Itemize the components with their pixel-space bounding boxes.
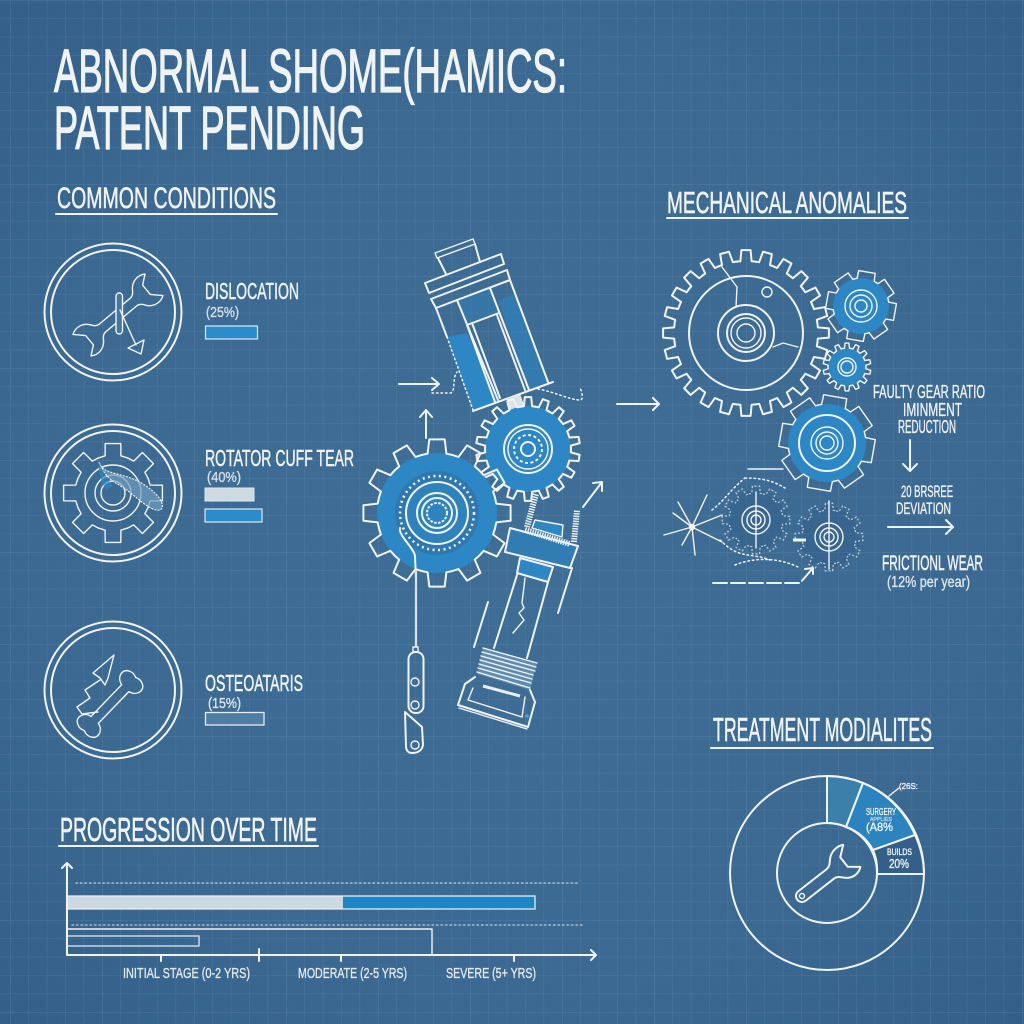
label: degree deviation: DEVIATION [896, 499, 951, 518]
donut labels [866, 782, 918, 871]
arrow: right [888, 520, 953, 534]
title [54, 37, 567, 162]
axis labels: SEVERE (5+ YRS) [446, 965, 536, 982]
label: dislocation [205, 278, 299, 339]
donut labels: (A8% [866, 820, 893, 834]
axis labels [123, 965, 536, 982]
gear: blue center right [748, 394, 876, 492]
label: osteoataris [205, 670, 303, 725]
label: dislocation: DISLOCATION [205, 278, 299, 304]
bar chart [62, 863, 596, 982]
diagram: central joint mechanism [363, 239, 659, 753]
label: frictional wear [882, 552, 983, 591]
label: rotator cuff tear: (40%) [207, 469, 241, 486]
handle link [400, 528, 424, 753]
label: dislocation: (25%) [206, 304, 239, 321]
axis labels: INITIAL STAGE (0-2 YRS) [123, 965, 250, 982]
panel: treatment modalities [711, 711, 933, 970]
label: rotator cuff tear: ROTATOR CUFF TEAR [205, 445, 354, 471]
arrow: dashed to wear [713, 568, 813, 583]
donut labels: SURGERY [866, 807, 896, 818]
label: faulty gear ratio [873, 382, 985, 437]
arrow: up [420, 410, 432, 438]
panel: progression over time [59, 811, 596, 982]
cylinder assembly [399, 239, 582, 428]
icon: wrench with arrow [44, 244, 182, 380]
gears: worn ghost pair [712, 478, 863, 571]
label: osteoataris: OSTEOATARIS [205, 670, 303, 696]
arrow: towards anomalies [617, 398, 659, 410]
icon: friction spark [664, 495, 722, 555]
panel: common conditions [44, 182, 354, 758]
donut labels: APPLIES [870, 817, 893, 823]
gear: blue upper right [825, 270, 897, 342]
heading: progression over time: PROGRESSION OVER TIME [60, 811, 317, 848]
label: degree deviation [896, 482, 953, 518]
label: osteoataris: (15%) [208, 695, 241, 712]
heading: common conditions: COMMON CONDITIONS [57, 182, 276, 215]
panel: mechanical anomalies [663, 185, 985, 591]
label: rotator cuff tear [205, 445, 354, 522]
label: frictional wear: (12% per year) [887, 574, 970, 591]
arrow: diagonal up right [583, 482, 602, 507]
donut labels: BUILDS [887, 847, 912, 857]
title: PATENT PENDING [54, 94, 365, 162]
gear: small blue [823, 343, 871, 391]
label: degree deviation: 20 BRSREE [901, 482, 953, 501]
title: ABNORMAL SHOME(HAMICS: [54, 37, 567, 105]
label: faulty gear ratio: REDUCTION [898, 417, 956, 437]
donut chart [730, 776, 924, 970]
icon: wrench [787, 843, 862, 913]
gear: large outline [663, 250, 829, 416]
arrow: down [903, 440, 917, 471]
gear: upper blue [476, 397, 580, 501]
gear: large blue [363, 439, 511, 587]
lower arm [458, 494, 578, 729]
axes [62, 863, 596, 961]
icon: gear with torn tendon [44, 424, 182, 562]
label: faulty gear ratio: IMINMENT [903, 400, 962, 420]
donut labels: (26S: [899, 782, 918, 791]
axis labels: MODERATE (2-5 YRS) [298, 965, 407, 982]
icon: bone with lightning [44, 622, 182, 758]
donut labels: 20% [889, 856, 909, 871]
